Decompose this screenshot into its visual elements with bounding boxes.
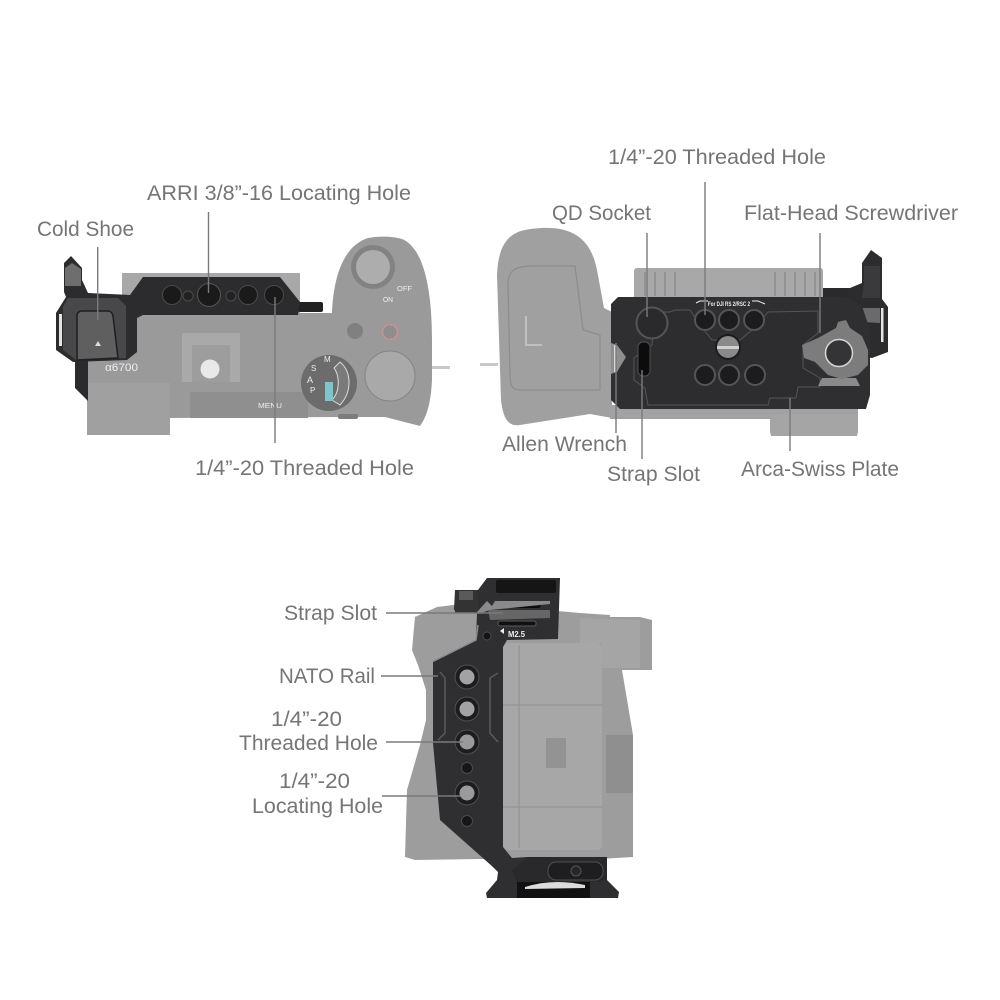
label: threaded hole, rear view: 1/4”-20 (271, 708, 342, 731)
camera markings: ON (383, 297, 393, 304)
camera grip side and mount (480, 228, 858, 436)
label: Cold Shoe: Cold Shoe (37, 218, 134, 241)
label: Strap Slot, rear view: Strap Slot (284, 602, 377, 625)
label: Arca-Swiss Plate: Arca-Swiss Plate (741, 458, 899, 481)
cage top plate with holes (56, 256, 323, 362)
flat-head screwdriver knob (802, 320, 868, 386)
label: ARRI locating hole: ARRI 3/8”-16 Locating Hole (147, 182, 411, 205)
cage bottom mount (512, 857, 607, 898)
mode dial (301, 355, 357, 411)
mode dial: M (324, 355, 331, 364)
label: threaded hole, side view: 1/4”-20 Threaded Hole (608, 146, 826, 169)
label: Strap Slot, side view: Strap Slot (607, 463, 700, 486)
panel: rear view of camera with cage (405, 578, 652, 898)
label: locating hole, rear view: Locating Hole (252, 795, 383, 818)
cage side lower piece (75, 360, 88, 401)
panel: top view of camera with cage (56, 237, 450, 435)
camera markings: α6700 (105, 362, 138, 374)
camera markings (105, 286, 412, 410)
label: locating hole, rear view (252, 770, 383, 818)
camera rear body (405, 603, 652, 860)
cage right bracket (823, 250, 888, 358)
label: QD Socket: QD Socket (552, 202, 651, 225)
label: threaded hole, rear view (239, 708, 378, 755)
camera markings: MENU (258, 401, 282, 410)
mode dial: P (310, 386, 315, 395)
label: threaded hole, rear view: Threaded Hole (239, 732, 378, 755)
label: Allen Wrench: Allen Wrench (502, 433, 627, 456)
base plate (611, 297, 870, 409)
base plate: For DJI RS 2/RSC 2 (708, 302, 751, 308)
mode dial: S (311, 364, 316, 373)
label: Flat-Head Screwdriver: Flat-Head Screwdriver (744, 202, 958, 225)
camera markings: OFF (397, 286, 412, 293)
label: NATO Rail: NATO Rail (279, 665, 375, 688)
cage top cold shoe and strap slot (455, 580, 556, 639)
leader lines (98, 182, 820, 796)
cage top cold shoe and strap slot: M2.5 (508, 630, 526, 639)
cage vertical side plate (433, 578, 619, 898)
label: threaded hole, top view: 1/4”-20 Threaded Hole (195, 457, 414, 480)
camera body top view (85, 237, 450, 435)
label: locating hole, rear view: 1/4”-20 (279, 770, 350, 793)
mode dial: A (307, 375, 313, 385)
panel: side view of camera with base plate (480, 228, 888, 436)
